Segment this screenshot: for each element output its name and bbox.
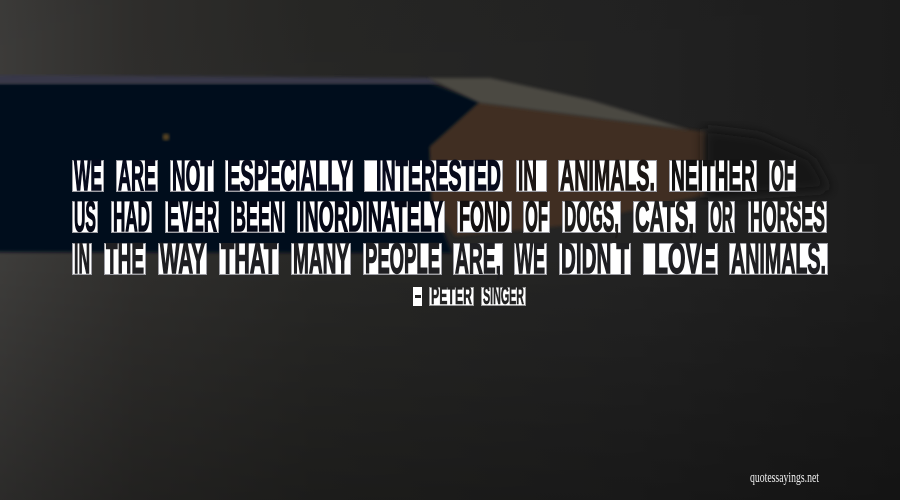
quote line 3: MANY bbox=[293, 235, 349, 283]
quote line 1: INTERESTED bbox=[376, 152, 501, 200]
quote line 1: IN bbox=[518, 152, 537, 200]
quote line 2: HAD bbox=[113, 193, 150, 241]
quote line 2: OF bbox=[525, 193, 548, 241]
quote text bbox=[72, 152, 828, 283]
attribution: Peter Singer: PETER bbox=[431, 282, 472, 310]
quote line 2: BEEN bbox=[233, 193, 283, 241]
quote line 3: IN bbox=[74, 235, 90, 283]
quote line 1: WE bbox=[74, 152, 102, 200]
text: SINGER bbox=[483, 282, 524, 310]
quote line 1: ANIMALS. bbox=[560, 152, 655, 200]
quote line 1: NOT bbox=[172, 152, 212, 200]
quote line 3: LOVE bbox=[654, 235, 716, 283]
quote line 3: WE bbox=[516, 235, 545, 283]
quote line 3: ARE, bbox=[455, 235, 501, 283]
quote line 1: NEITHER bbox=[671, 152, 755, 200]
quote line 1 bbox=[72, 152, 796, 200]
quote line 3: THAT bbox=[221, 235, 277, 283]
quote line 3: PEOPLE bbox=[365, 235, 440, 283]
quote line 1: ESPECIALLY bbox=[227, 152, 351, 200]
quote text: OF bbox=[771, 152, 794, 200]
quote line 3: DIDN'T bbox=[561, 235, 629, 283]
quote line 2: FOND bbox=[459, 193, 510, 241]
quote line 1: ARE bbox=[118, 152, 156, 200]
quote line 3: THE bbox=[106, 235, 144, 283]
quote line 2: OR bbox=[710, 193, 733, 241]
watermark: quotessayings.net bbox=[750, 470, 820, 486]
quote line 2: EVER bbox=[167, 193, 217, 241]
quote line 3: WAY bbox=[160, 235, 205, 283]
quote line 2: INORDINATELY bbox=[299, 193, 443, 241]
quote line 2: CATS, bbox=[635, 193, 694, 241]
quote line 2: US bbox=[74, 193, 96, 241]
pencil illustration bbox=[0, 75, 830, 253]
quote line 2 bbox=[72, 193, 826, 241]
quote line 2: DOGS, bbox=[564, 193, 619, 241]
quote line 3 bbox=[72, 235, 828, 283]
